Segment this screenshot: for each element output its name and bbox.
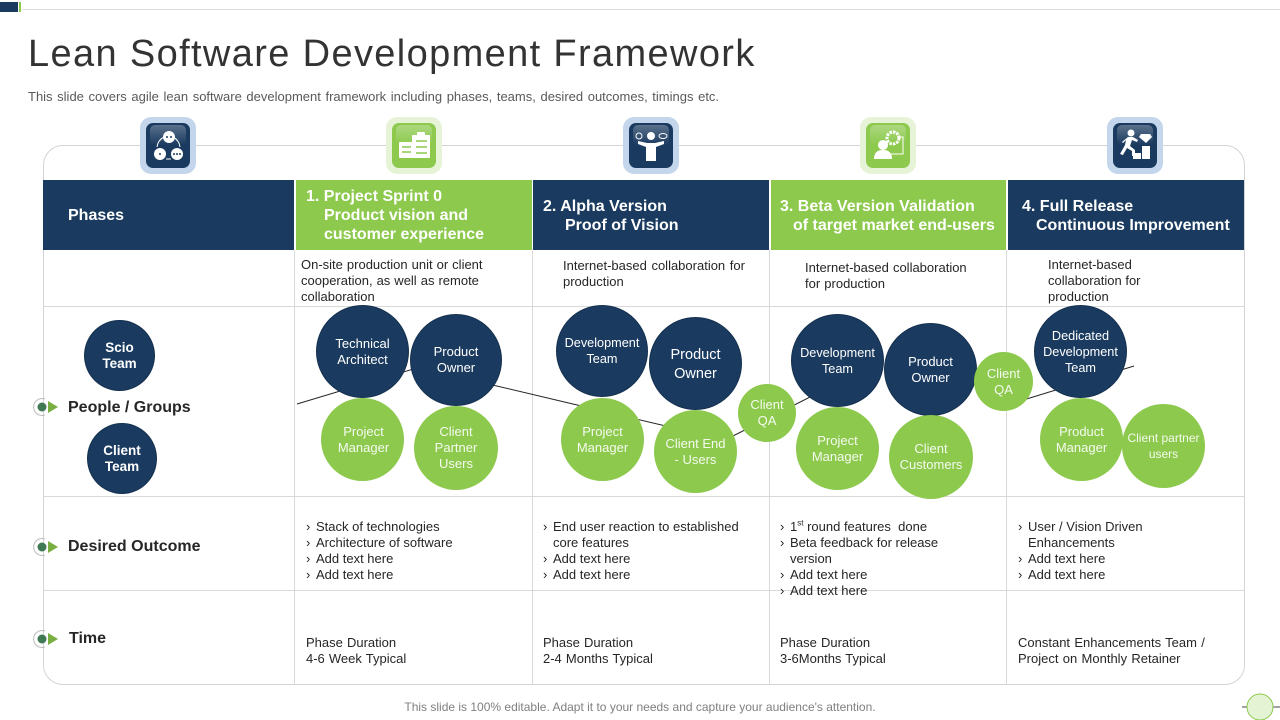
outcomes phase 4: › bbox=[1018, 567, 1022, 582]
outcomes phase 3: Add text here bbox=[790, 567, 867, 582]
circle: dedicated development team: Team bbox=[1065, 360, 1096, 374]
outcomes phase 1: › bbox=[306, 535, 310, 550]
outcomes phase 2: › bbox=[543, 567, 547, 582]
circle: client end users bbox=[654, 410, 737, 493]
circle: client partner users 1: Client bbox=[439, 424, 473, 439]
outcomes phase 2: Add text here bbox=[553, 567, 630, 582]
icon: person with gear bbox=[860, 117, 916, 174]
time phase 2: Phase Duration bbox=[543, 635, 633, 650]
marker: desired outcome bbox=[33, 538, 58, 556]
header: beta version validation: 3. Beta Version Validation bbox=[780, 198, 975, 215]
outcomes phase 3: 1st round features done bbox=[790, 519, 927, 534]
circle: client customers: Customers bbox=[900, 457, 962, 472]
circle: client end users: - Users bbox=[675, 452, 716, 466]
outcomes phase 1: Add text here bbox=[316, 551, 393, 566]
time phase 1 bbox=[306, 635, 406, 666]
circle: project manager 3 bbox=[796, 407, 879, 490]
outcomes phase 4: Add text here bbox=[1028, 551, 1105, 566]
outcomes phase 3: › bbox=[780, 583, 784, 598]
circle: development team 3: Development bbox=[800, 346, 875, 360]
circle: scio team: Scio bbox=[105, 340, 134, 354]
circle: scio team bbox=[85, 321, 154, 390]
phase description 3 bbox=[805, 260, 967, 291]
top accent bar bbox=[0, 2, 1280, 12]
circle: client partner users 1 bbox=[414, 406, 498, 490]
outcomes phase 3: › bbox=[780, 519, 784, 534]
circle: client qa 3 bbox=[974, 352, 1033, 411]
time phase 3 bbox=[780, 635, 886, 666]
header: project sprint 0 bbox=[296, 180, 532, 250]
circle: product owner 1 bbox=[411, 315, 501, 405]
circle: product owner 2: Product bbox=[670, 346, 720, 362]
circle: product owner 3: Owner bbox=[911, 370, 950, 384]
header: project sprint 0: Product vision and bbox=[324, 207, 468, 224]
circle: client qa 2: Client bbox=[750, 397, 784, 412]
circle: project manager 2: Manager bbox=[577, 440, 628, 454]
circle: client customers bbox=[889, 415, 973, 499]
outcomes phase 3: version bbox=[790, 551, 832, 566]
circle: client end users: Client End bbox=[666, 436, 725, 450]
outcomes phase 1: Stack of technologies bbox=[316, 519, 440, 534]
circle: project manager 1 bbox=[321, 398, 404, 481]
circle: project manager 1: Project bbox=[343, 424, 384, 438]
header: alpha version bbox=[533, 180, 769, 250]
phase description 3: for production bbox=[805, 276, 885, 291]
circle: client team bbox=[88, 424, 156, 493]
marker: people / groups bbox=[33, 398, 58, 416]
circle: project manager 3: Manager bbox=[812, 448, 863, 464]
circle: development team 3 bbox=[792, 315, 883, 406]
circle: product owner 1: Product bbox=[434, 344, 478, 359]
outcomes phase 4: › bbox=[1018, 551, 1022, 566]
circle: client partner users 1: Users bbox=[439, 456, 473, 471]
phase description 3: Internet-based collaboration bbox=[805, 260, 967, 275]
circle: product manager 4: Manager bbox=[1056, 440, 1107, 454]
outcomes phase 2: core features bbox=[553, 535, 629, 550]
outcomes phase 1: › bbox=[306, 519, 310, 534]
circle: dedicated development team bbox=[1035, 306, 1126, 397]
circle: development team 2: Team bbox=[586, 352, 618, 366]
outcomes phase 4: User / Vision Driven bbox=[1028, 519, 1143, 534]
header: phases bbox=[43, 180, 294, 250]
footer note: This slide is 100% editable. Adapt it to your needs and capture your audience's attention. bbox=[404, 700, 876, 714]
outcomes phase 4: › bbox=[1018, 519, 1022, 534]
outcomes phase 1: › bbox=[306, 551, 310, 566]
outcomes phase 2: › bbox=[543, 519, 547, 534]
circle: client partner users 4: users bbox=[1149, 447, 1178, 461]
phase description 2 bbox=[563, 258, 745, 289]
circle: client customers: Client bbox=[914, 441, 948, 456]
row label: time: Time bbox=[69, 630, 106, 647]
time phase 4: Constant Enhancements Team / bbox=[1018, 635, 1205, 650]
circle: client partner users 1: Partner bbox=[435, 440, 477, 455]
phase description 1: collaboration bbox=[301, 289, 375, 304]
circle: client partner users 4 bbox=[1122, 404, 1205, 488]
outcomes phase 3 bbox=[780, 519, 938, 598]
header: project sprint 0: customer experience bbox=[324, 226, 484, 243]
circle: product owner 3 bbox=[885, 324, 976, 415]
time phase 1: 4-6 Week Typical bbox=[306, 651, 406, 666]
header: alpha version: Proof of Vision bbox=[565, 217, 678, 234]
outcomes phase 3: › bbox=[780, 535, 784, 550]
circle: product owner 2 bbox=[650, 318, 741, 409]
marker: time bbox=[33, 630, 58, 648]
phase description 2: Internet-based collaboration for bbox=[563, 258, 745, 273]
row label: desired outcome: Desired Outcome bbox=[68, 538, 200, 555]
circle: project manager 1: Manager bbox=[338, 440, 389, 454]
circle: product owner 3: Product bbox=[908, 354, 953, 368]
circle: client team: Client bbox=[103, 442, 141, 458]
outcomes phase 2 bbox=[543, 519, 739, 582]
circle: client qa 2: QA bbox=[758, 413, 776, 428]
header: beta version validation: of target market end-users bbox=[793, 217, 995, 234]
outcomes phase 1: › bbox=[306, 567, 310, 582]
time phase 3: 3-6Months Typical bbox=[780, 651, 886, 666]
circle: project manager 2 bbox=[561, 398, 644, 481]
phase description 4 bbox=[1048, 257, 1140, 304]
outcomes phase 4: Enhancements bbox=[1028, 535, 1115, 550]
outcomes phase 3: Add text here bbox=[790, 583, 867, 598]
header: full release: 4. Full Release bbox=[1022, 198, 1133, 215]
header: phases: Phases bbox=[68, 207, 124, 224]
circle: dedicated development team: Development bbox=[1043, 344, 1118, 358]
icon: team cycle bbox=[140, 117, 196, 174]
phase description 4: production bbox=[1048, 289, 1109, 304]
circle: technical architect: Technical bbox=[335, 336, 390, 350]
time phase 4: Project on Monthly Retainer bbox=[1018, 651, 1181, 666]
circle: client team: Team bbox=[105, 458, 139, 474]
row label: people / groups: People / Groups bbox=[68, 399, 191, 416]
circle: development team 3: Team bbox=[822, 362, 853, 376]
circle: development team 2: Development bbox=[565, 336, 639, 350]
circle: technical architect: Architect bbox=[337, 352, 388, 366]
circle: product manager 4: Product bbox=[1059, 424, 1104, 438]
outcomes phase 4 bbox=[1018, 519, 1143, 582]
icon: checklist bbox=[386, 117, 442, 174]
circle: scio team: Team bbox=[102, 356, 137, 370]
time phase 4 bbox=[1018, 635, 1205, 666]
outcomes phase 2: › bbox=[543, 551, 547, 566]
outcomes phase 1 bbox=[306, 519, 453, 582]
outcomes phase 2: Add text here bbox=[553, 551, 630, 566]
outcomes phase 1: Add text here bbox=[316, 567, 393, 582]
subtitle: This slide covers agile lean software development framework including phases, teams, desired outcomes, timings etc. bbox=[28, 89, 719, 104]
corner marker bbox=[1242, 694, 1280, 720]
phase description 4: Internet-based bbox=[1048, 257, 1132, 272]
icon: person with options bbox=[623, 117, 679, 174]
title: Lean Software Development Framework bbox=[28, 33, 756, 75]
phase description 1 bbox=[301, 257, 483, 304]
circle: development team 2 bbox=[557, 306, 647, 396]
icon: climbing steps bbox=[1107, 117, 1163, 174]
circle: client qa 3: QA bbox=[994, 382, 1013, 396]
outcomes phase 2: End user reaction to established bbox=[553, 519, 739, 534]
header: beta version validation bbox=[771, 180, 1006, 250]
outcomes phase 3: › bbox=[780, 567, 784, 582]
header: alpha version: 2. Alpha Version bbox=[543, 198, 667, 215]
circle: client qa 2 bbox=[738, 384, 796, 442]
time phase 2: 2-4 Months Typical bbox=[543, 651, 653, 666]
circle: product owner 2: Owner bbox=[674, 366, 717, 382]
circle: project manager 3: Project bbox=[817, 432, 858, 448]
circle: dedicated development team: Dedicated bbox=[1052, 328, 1109, 342]
time phase 1: Phase Duration bbox=[306, 635, 396, 650]
time phase 3: Phase Duration bbox=[780, 635, 870, 650]
phase description 1: cooperation, as well as remote bbox=[301, 273, 479, 288]
phase description 2: production bbox=[563, 274, 624, 289]
outcomes phase 4: Add text here bbox=[1028, 567, 1105, 582]
circle: client qa 3: Client bbox=[987, 366, 1020, 380]
circle: technical architect bbox=[317, 306, 408, 397]
framework table outline bbox=[43, 145, 1245, 685]
circle: product manager 4 bbox=[1040, 398, 1123, 481]
time phase 2 bbox=[543, 635, 653, 666]
header: full release: Continuous Improvement bbox=[1036, 217, 1230, 234]
circle: project manager 2: Project bbox=[582, 424, 623, 438]
phase description 4: collaboration for bbox=[1048, 273, 1140, 288]
phase description 1: On-site production unit or client bbox=[301, 257, 483, 272]
outcomes phase 1: Architecture of software bbox=[316, 535, 453, 550]
outcomes phase 3: Beta feedback for release bbox=[790, 535, 938, 550]
circle: product owner 1: Owner bbox=[437, 360, 475, 375]
header: project sprint 0: 1. Project Sprint 0 bbox=[306, 188, 442, 205]
circle: client partner users 4: Client partner bbox=[1127, 431, 1200, 445]
header: full release bbox=[1008, 180, 1244, 250]
